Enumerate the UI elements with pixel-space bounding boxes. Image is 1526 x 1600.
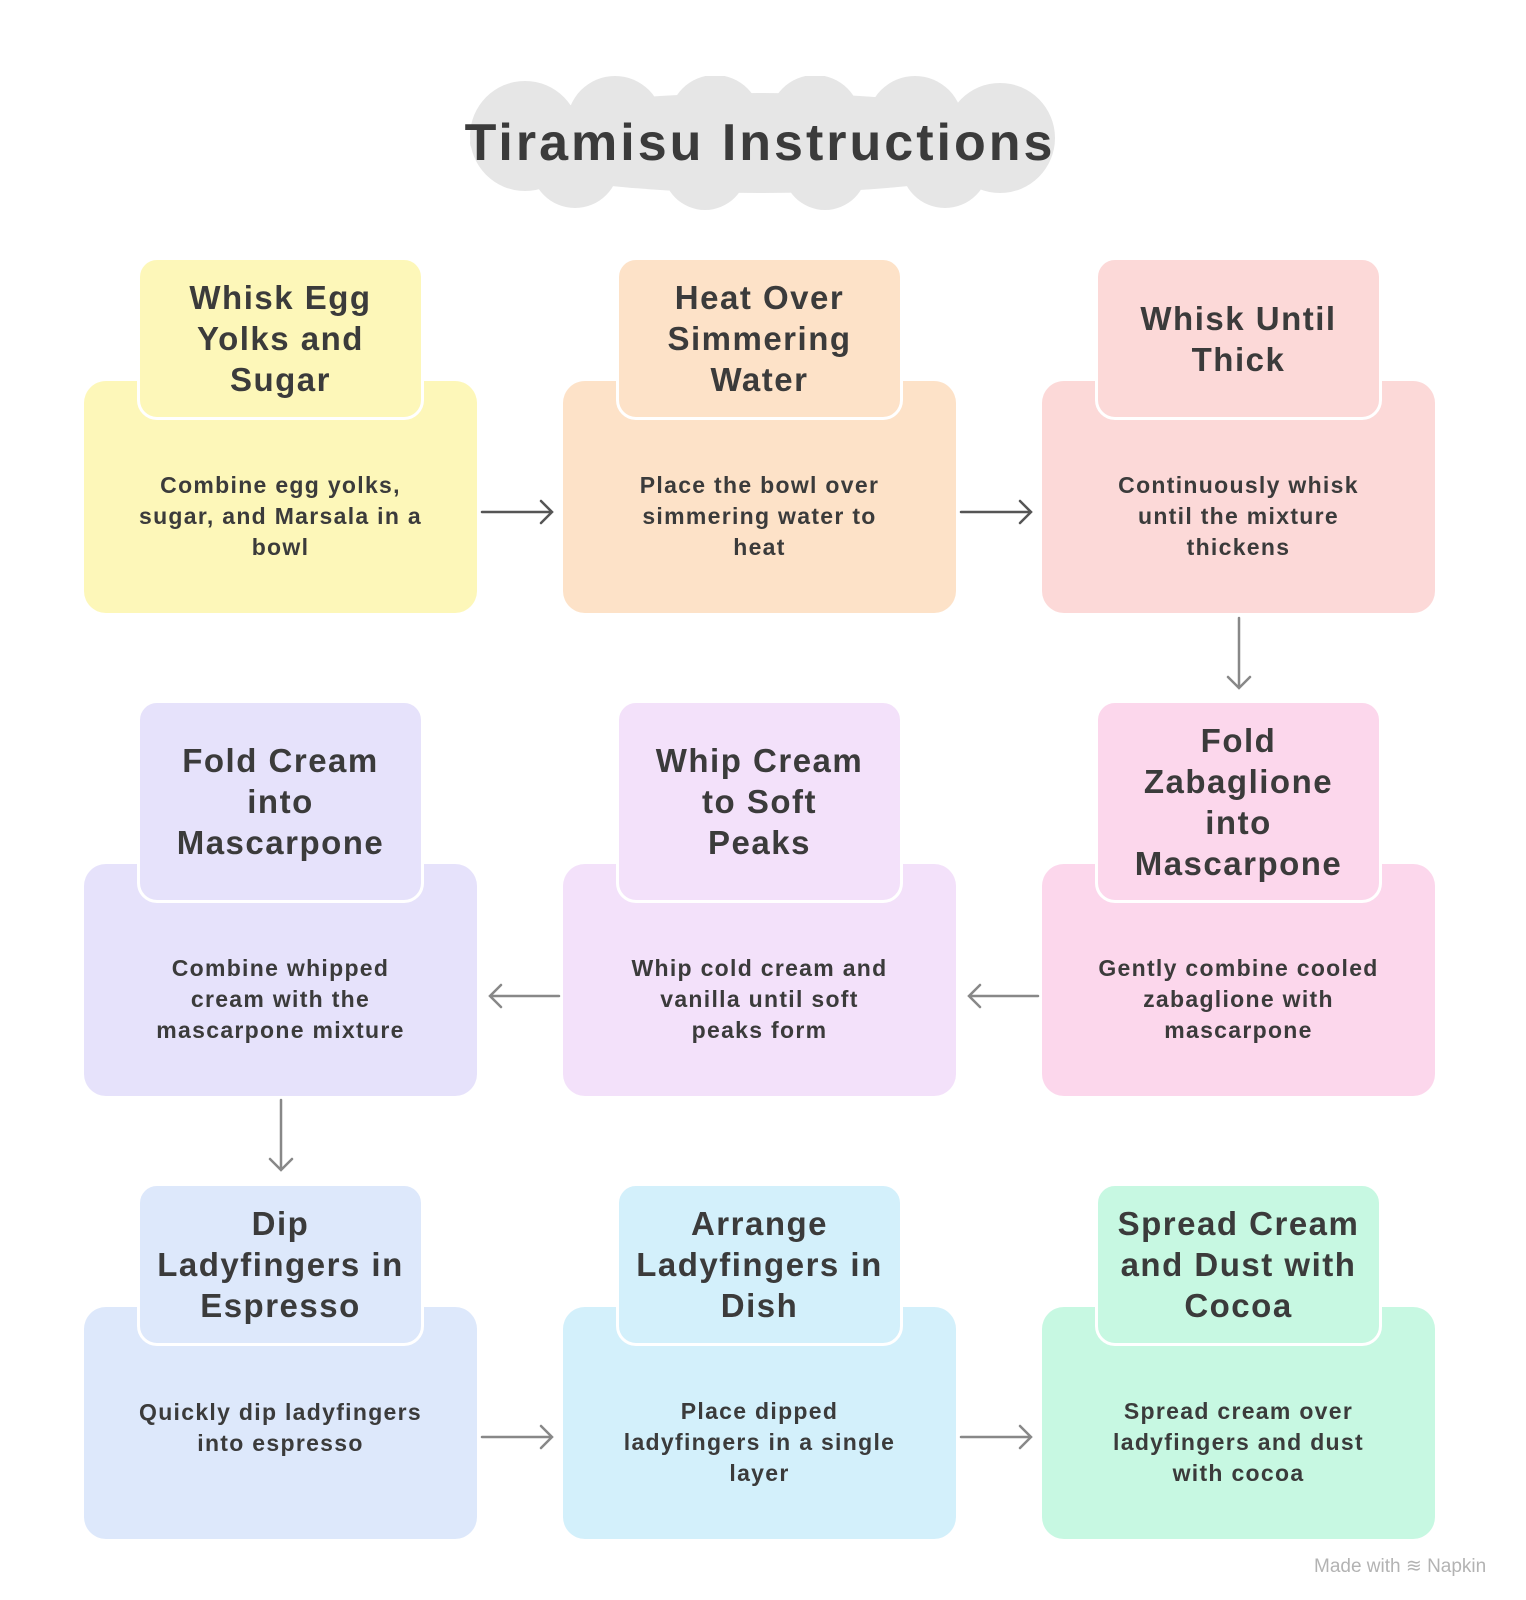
- heading: Dip: [252, 1205, 309, 1242]
- description: ladyfingers and dust: [1113, 1429, 1364, 1455]
- card 3: whisk until thick: [1042, 260, 1435, 613]
- title: [465, 76, 1055, 210]
- arrow 2 to 3: [961, 501, 1031, 523]
- arrow 4 to 7: [270, 1100, 292, 1170]
- heading: Simmering: [667, 320, 852, 357]
- description: Quickly dip ladyfingers: [139, 1398, 422, 1424]
- description: vanilla until soft: [660, 986, 859, 1012]
- heading: Dish: [721, 1287, 798, 1324]
- description: layer: [729, 1460, 790, 1486]
- description: thickens: [1187, 534, 1290, 560]
- arrow 6 to 5: [969, 985, 1038, 1007]
- footer: made with napkin: Made with ≋ Napkin: [1314, 1556, 1486, 1577]
- description: ladyfingers in a single: [624, 1429, 895, 1455]
- card 4: fold cream into mascarpone: [84, 703, 477, 1096]
- heading: Whisk Until: [1140, 300, 1337, 336]
- description: [1118, 472, 1359, 560]
- heading: into: [247, 783, 314, 820]
- description: zabaglione with: [1143, 986, 1334, 1012]
- description: [631, 955, 888, 1043]
- description: [1113, 1398, 1364, 1486]
- description: [1098, 955, 1379, 1043]
- description: into espresso: [197, 1430, 364, 1456]
- heading: Whisk Egg: [189, 279, 372, 316]
- heading: Arrange: [691, 1205, 828, 1242]
- heading: Fold Cream: [182, 742, 379, 779]
- heading: Ladyfingers in: [157, 1246, 404, 1283]
- heading: Peaks: [708, 824, 811, 861]
- card 1: whisk egg yolks: [84, 260, 477, 613]
- description: mascarpone: [1164, 1017, 1313, 1043]
- description: Spread cream over: [1124, 1398, 1353, 1424]
- arrow 5 to 4: [490, 985, 559, 1007]
- heading: Ladyfingers in: [636, 1246, 883, 1283]
- heading: [1095, 1183, 1382, 1346]
- description: sugar, and Marsala in a: [139, 503, 422, 529]
- heading: [1095, 700, 1382, 903]
- description: Whip cold cream and: [631, 955, 888, 981]
- heading: [616, 1183, 903, 1346]
- description: [624, 1398, 895, 1486]
- description: cream with the: [191, 986, 370, 1012]
- card 5: whip cream: [563, 703, 956, 1096]
- heading: Cocoa: [1184, 1287, 1293, 1324]
- description: peaks form: [692, 1017, 827, 1043]
- heading: Espresso: [200, 1287, 361, 1324]
- description: Gently combine cooled: [1098, 955, 1379, 981]
- description: Place the bowl over: [640, 472, 879, 498]
- heading: Thick: [1192, 340, 1285, 378]
- heading: [137, 257, 424, 420]
- heading: Spread Cream: [1118, 1205, 1359, 1242]
- description: heat: [733, 534, 786, 560]
- card 7: dip ladyfingers: [84, 1186, 477, 1539]
- heading: [616, 257, 903, 420]
- card 9: spread cream: [1042, 1186, 1435, 1539]
- heading: Fold: [1201, 722, 1276, 758]
- description: with cocoa: [1173, 1460, 1304, 1486]
- arrow 7 to 8: [482, 1426, 552, 1448]
- description: [156, 955, 405, 1043]
- description: mascarpone mixture: [156, 1017, 405, 1043]
- card 6: fold zabaglione: [1042, 703, 1435, 1096]
- heading: [137, 700, 424, 903]
- description: Combine whipped: [172, 955, 389, 981]
- description: [139, 1398, 422, 1456]
- card 2: heat over water: [563, 260, 956, 613]
- description: simmering water to: [642, 503, 877, 529]
- arrow 8 to 9: [961, 1426, 1031, 1448]
- heading: Mascarpone: [1135, 844, 1342, 882]
- card 8: arrange ladyfingers: [563, 1186, 956, 1539]
- description: Place dipped: [681, 1398, 838, 1424]
- heading: Sugar: [230, 361, 331, 398]
- title: Tiramisu Instructions: [465, 114, 1055, 172]
- description: [640, 472, 879, 560]
- heading: into: [1205, 804, 1272, 840]
- heading: Water: [710, 361, 808, 398]
- heading: [1095, 257, 1382, 420]
- heading: Heat Over: [675, 279, 844, 316]
- description: bowl: [252, 534, 309, 560]
- heading: [616, 700, 903, 903]
- description: Continuously whisk: [1118, 472, 1359, 498]
- heading: Zabaglione: [1144, 762, 1333, 800]
- description: Combine egg yolks,: [160, 472, 401, 498]
- description: [139, 472, 422, 560]
- arrow 1 to 2: [482, 501, 552, 523]
- heading: Yolks and: [197, 320, 364, 357]
- heading: Mascarpone: [177, 824, 384, 861]
- heading: and Dust with: [1121, 1246, 1356, 1283]
- arrow 3 to 6: [1228, 618, 1250, 688]
- description: until the mixture: [1138, 503, 1339, 529]
- heading: [137, 1183, 424, 1346]
- heading: to Soft: [702, 783, 817, 820]
- heading: Whip Cream: [656, 742, 863, 779]
